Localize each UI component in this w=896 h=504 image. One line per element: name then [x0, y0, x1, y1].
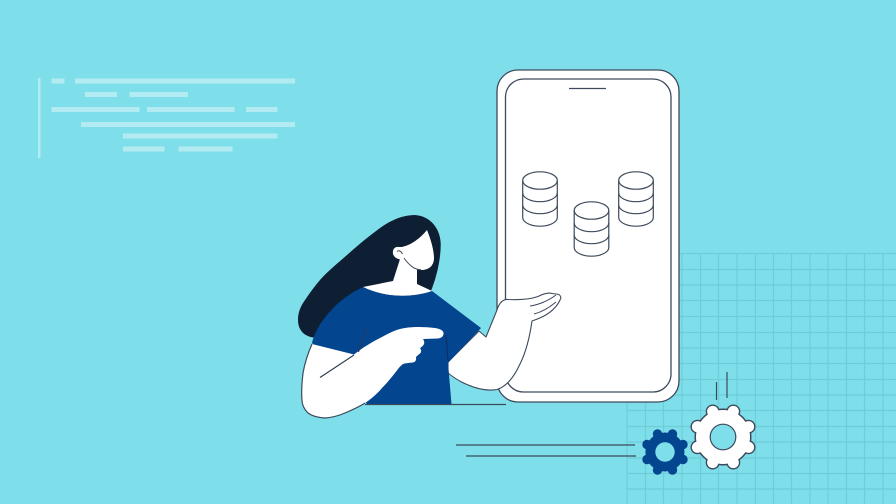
base line: [365, 404, 506, 406]
shirt: [312, 287, 481, 404]
neck and collar: [363, 256, 432, 296]
speed lines left: [456, 445, 636, 456]
left arm outline: [302, 344, 365, 418]
face outline: [397, 251, 421, 270]
motion lines above gear: [716, 372, 727, 400]
right arm and open hand: [448, 293, 561, 390]
arm crease: [320, 329, 366, 378]
icon: database centre: [574, 202, 609, 256]
phone: [497, 70, 679, 402]
icon: database left: [523, 172, 557, 226]
finger lines: [530, 295, 556, 314]
hair: [298, 215, 441, 338]
shirt crease: [446, 335, 448, 361]
background grid: [627, 253, 896, 504]
face and ear: [393, 230, 434, 270]
icon: blue gear: [642, 429, 688, 475]
code lines decoration: [38, 78, 295, 158]
woman figure: [298, 215, 561, 418]
icon: white gear: [692, 406, 754, 468]
left arm and pointing hand: [302, 327, 444, 418]
icon: database right: [619, 172, 653, 226]
